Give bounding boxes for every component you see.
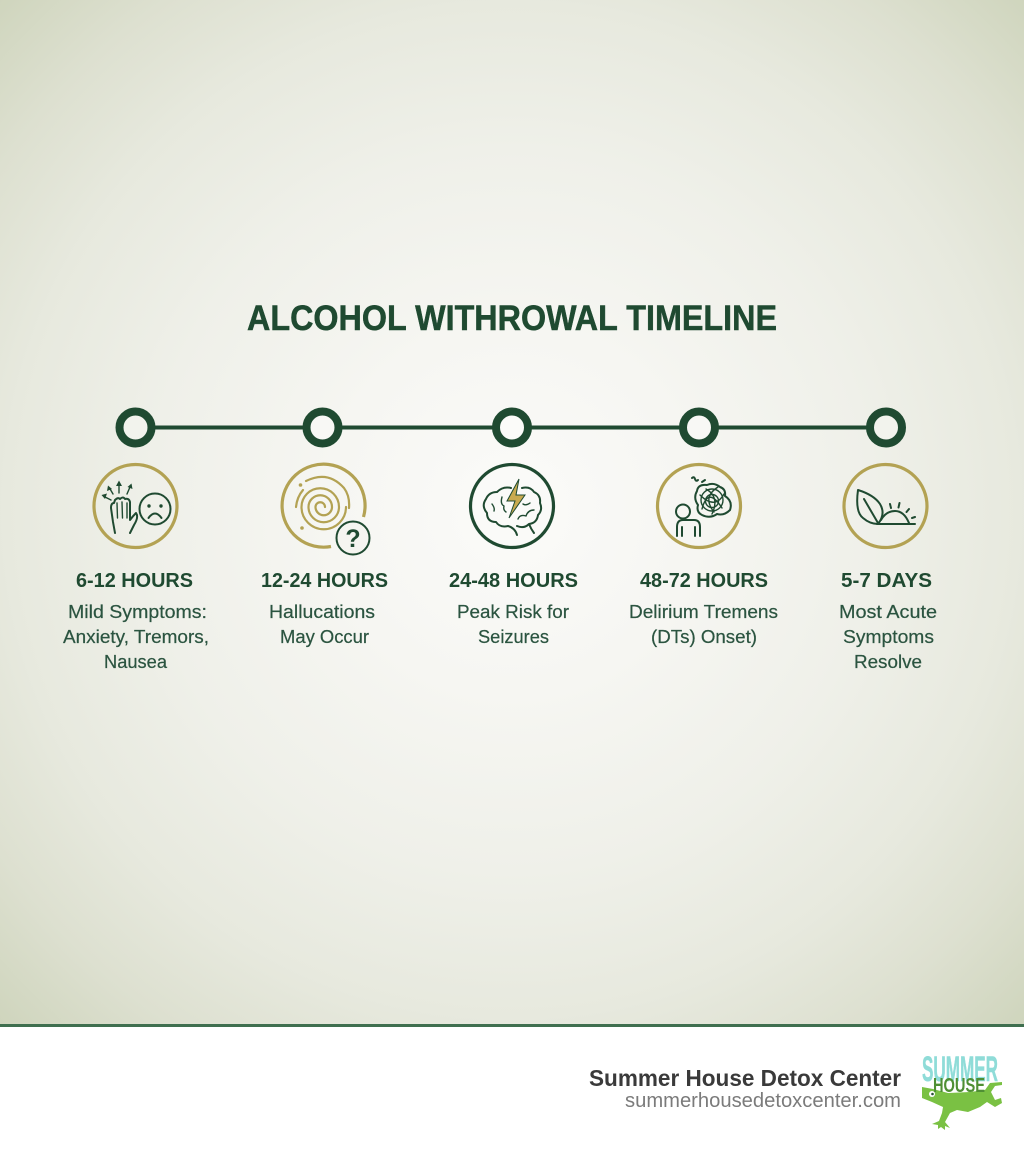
step 1 text: Mild Symptoms: (68, 602, 207, 622)
step 4 text: (DTs) Onset) (651, 627, 757, 647)
timeline (120, 412, 902, 444)
step 5 text: Most Acute (839, 602, 937, 622)
step 2 text: 12-24 HOURS (261, 570, 388, 592)
icon: spiral with question mark: ? (345, 525, 361, 553)
footer brand text: Summer House Detox Center (589, 1065, 901, 1091)
footer divider (0, 1024, 1024, 1027)
step 2 text: Hallucations (269, 602, 375, 622)
icon: spiral with question mark (282, 464, 370, 554)
logo: Summer House lizard (922, 1050, 1002, 1130)
step 5 text: Symptoms (843, 627, 934, 647)
step 1 text: Anxiety, Tremors, (63, 627, 209, 647)
footer brand text (589, 1065, 901, 1112)
title: ALCOHOL WITHROWAL TIMELINE (247, 299, 777, 338)
node 1 (120, 412, 152, 444)
node 2 (306, 412, 338, 444)
step 4 text: 48-72 HOURS (640, 570, 768, 592)
footer brand text: summerhousedetoxcenter.com (625, 1090, 901, 1112)
node 4 (683, 412, 715, 444)
step 2 text: May Occur (280, 627, 369, 647)
step 3 text: Peak Risk for (457, 602, 569, 622)
node 3 (496, 412, 528, 444)
icon: brain with lightning bolt (470, 464, 554, 548)
step 4 text (629, 570, 778, 647)
step 2 text (261, 570, 388, 647)
step 3 text (449, 570, 578, 647)
icon: person with tangled thoughts (658, 464, 740, 548)
step 5 text: 5-7 DAYS (841, 570, 932, 592)
step 5 text (839, 570, 937, 672)
step 3 text: 24-48 HOURS (449, 570, 578, 592)
icon: leaf and rising sun (844, 464, 927, 548)
node 5 (870, 412, 902, 444)
logo: Summer House lizard: HOUSE (933, 1075, 985, 1097)
timeline line (135, 426, 886, 430)
step 1 text: Nausea (104, 652, 168, 672)
step 3 text: Seizures (478, 627, 549, 647)
step 5 text: Resolve (854, 652, 922, 672)
step 1 text: 6-12 HOURS (76, 570, 193, 592)
step 4 text: Delirium Tremens (629, 602, 778, 622)
icon: shaking hand and sad face (94, 464, 177, 548)
step 1 text (63, 570, 209, 672)
